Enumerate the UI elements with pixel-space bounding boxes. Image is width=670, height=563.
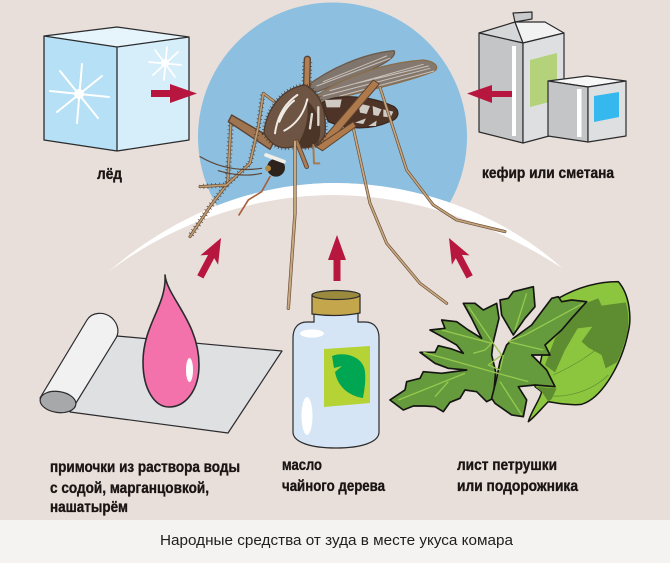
- icon: tea tree oil bottle: [293, 290, 379, 448]
- blue circle backdrop: [110, 2, 560, 320]
- icon: ice cube: [44, 27, 189, 151]
- label: leaf: [457, 457, 578, 495]
- arrow: oil to bite: [328, 235, 346, 281]
- icon: compress with pink drop: [39, 275, 282, 433]
- middle leg: [288, 142, 319, 308]
- label: oil: [282, 457, 385, 495]
- label: compress: примочки из раствора воды: [50, 459, 240, 476]
- parsley top leaflet: [500, 287, 535, 335]
- thorax: [264, 85, 325, 148]
- antennae and proboscis: [200, 157, 270, 215]
- icon: small snowflake: [149, 47, 181, 80]
- icon: kefir cartons: [479, 12, 626, 143]
- hind legs: [316, 80, 505, 303]
- parsley right half: [492, 297, 587, 417]
- label: compress: нашатырём: [50, 499, 128, 516]
- icon: pink drop: [143, 275, 199, 407]
- icon: plantain leaf: [528, 282, 630, 422]
- caption: Народные средства от зуда в месте укуса комара: [160, 533, 514, 549]
- label: compress: [50, 459, 240, 516]
- mosquito: [190, 51, 505, 308]
- front legs: [190, 93, 277, 237]
- arrow: ice to mosquito: [151, 84, 197, 103]
- parsley left half: [390, 303, 499, 412]
- arrow: kefir to mosquito: [467, 85, 512, 103]
- icon: large snowflake: [50, 64, 109, 123]
- icon: parsley leaf: [390, 287, 587, 417]
- label: compress: с содой, марганцовкой,: [50, 480, 209, 497]
- arrow: lotion to bite: [192, 233, 230, 282]
- label: ice: лёд: [97, 166, 122, 183]
- wings: [305, 51, 437, 104]
- abdomen: [322, 97, 398, 128]
- arrow: leaf to bite: [440, 233, 478, 282]
- label: leaf: или подорожника: [457, 478, 578, 495]
- label: kefir: кефир или сметана: [482, 165, 614, 182]
- label: oil: масло: [282, 457, 322, 474]
- label: oil: чайного дерева: [282, 478, 385, 495]
- parsley veins: [398, 293, 583, 415]
- label: leaf: лист петрушки: [457, 457, 557, 474]
- head: [265, 155, 285, 177]
- leg: upper short: [292, 59, 322, 85]
- white skin arc: [108, 183, 562, 272]
